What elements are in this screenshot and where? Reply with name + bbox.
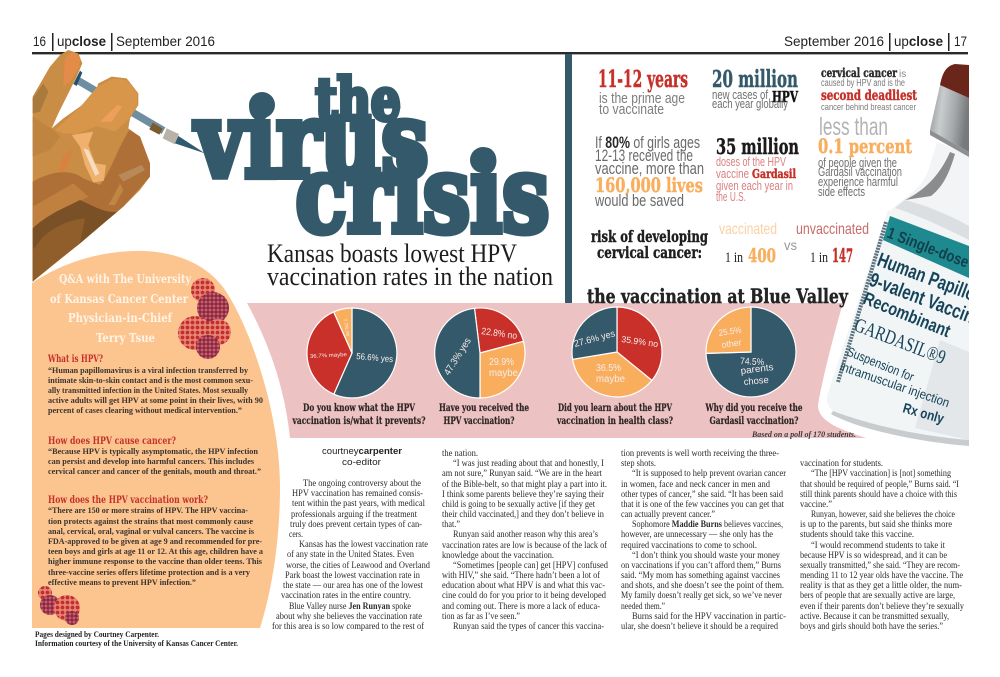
article column 3: in women, face and neck cancer in men and [621, 479, 770, 490]
article column 1: professionals arguing if the treatment [291, 509, 417, 520]
article column 1: tent within the past years, with medical [292, 499, 425, 509]
teal vertical divider [565, 54, 572, 304]
article column 4: boys and girls should both have the series.” [800, 622, 943, 632]
stat: 160,000 lives: vaccine, more than [595, 160, 704, 178]
article column 1: truly does prevent certain types of can- [290, 519, 422, 530]
pie chart: why Gardasil: 74.5% [740, 356, 765, 368]
question: how does HPV cause cancer: cervical cancer and cancer of the genitals, mouth and throat.” [48, 466, 261, 476]
question: how does the vaccination work: higher immune response to the vaccine than older teens. This [48, 556, 263, 566]
credits [35, 630, 238, 648]
question: how does the vaccination work: “There are 150 or more strains of HPV. The HPV vaccina- [48, 505, 248, 515]
question: how does the vaccination work: effective means to prevent HPV infection.” [48, 577, 196, 587]
article column 2: cine could do for you prior to it being developed [442, 590, 606, 601]
article column 4 [800, 458, 964, 632]
pie chart: why Gardasil: Gardasil vaccination? [710, 416, 799, 427]
stat: new cases: HPV [772, 88, 798, 106]
pie chart: health class: 35.9% no [621, 334, 659, 349]
question: what is HPV: “Human papillomavirus is a viral infection transferred by [48, 365, 249, 375]
stat: new cases: each year globally [712, 97, 789, 111]
stat: 160,000 lives: 160,000 lives [595, 173, 703, 197]
stat: new cases [712, 66, 798, 111]
stat: 35 million doses: vaccine [716, 167, 749, 181]
article column 3: other types of cancer,” she said. “It has been said [621, 489, 783, 500]
byline: co-editor [342, 457, 381, 468]
stat: risk of developing cervical cancer: 400 [748, 245, 776, 267]
stat: 160,000 lives: would be saved [594, 192, 684, 210]
article column 3: on vaccinations if you can’t afford them,” Burns [621, 560, 781, 571]
pie chart: health class: 27.6% yes [573, 328, 617, 350]
article column 4: “I would recommend students to take it [811, 541, 945, 551]
stat: second deadliest: caused by HPV and is the [821, 78, 905, 89]
article column 3: that it is one of the few vaccines you can get that [621, 499, 784, 510]
pie chart: have you received: HPV vaccination? [444, 416, 515, 427]
page header: left: upclose [57, 34, 106, 49]
question: how does the vaccination work: tion protects against the strains that most commonly cause [48, 516, 253, 526]
stat: 35 million doses: Gardasil [752, 167, 796, 181]
stat: prime age: is the prime age [599, 90, 685, 107]
stat: risk of developing cervical cancer [591, 221, 869, 267]
illustration: Gardasil vial: Recombinant [861, 288, 953, 341]
question: what is HPV: What is HPV? [47, 354, 103, 365]
question: how does the vaccination work: three-vaccine series offers lifetime protection and is a very [48, 567, 251, 577]
article column 2: of the Bible-belt, so that might play a part into it. [442, 479, 607, 490]
stat: second deadliest [821, 66, 917, 113]
stat: 35 million doses [716, 134, 799, 204]
article column 1: worse, the cities of Leawood and Overland [286, 560, 430, 571]
article column 2: the nation. [442, 449, 478, 459]
article column 3: Burns said for the HPV vaccination in partic- [632, 611, 786, 622]
article column 3: Sophomore Maddie Burns believes vaccines, [632, 520, 783, 530]
pie chart: do you know: Do you know what the HPV [303, 403, 415, 414]
article column 3: and shots, and she doesn’t see the point of them. [621, 580, 784, 591]
question: how does the vaccination work [48, 494, 264, 587]
title: the virus crisis: the [316, 66, 400, 134]
sidebar heading: of Kansas Cancer Center [50, 291, 188, 306]
article column 4: students should take this vaccine. [800, 530, 914, 540]
stat: 35 million doses: doses of the HPV [716, 155, 786, 169]
article column 1: the state — our area has one of the lowest [283, 580, 423, 591]
article column 3: tion prevents is well worth receiving the three- [621, 449, 779, 459]
pie chart: have you received: Have you received the [439, 403, 529, 414]
question: what is HPV: active adults will get HPV at some point in their lives, with 90 [48, 395, 263, 405]
stat: risk of developing cervical cancer: 1 in [810, 250, 828, 266]
heading: the vaccination at Blue Valley: the vaccination at Blue Valley [587, 284, 849, 308]
stat: prime age [598, 66, 688, 118]
pie chart: why Gardasil: other [721, 337, 742, 350]
article column 4: still think parents should have a choice with this [800, 490, 957, 500]
article column 2: and coming out. There is more a lack of educa- [442, 601, 600, 612]
question: how does the vaccination work: anal, cervical, oral, vaginal or vulval cancers. The vaccine is [48, 526, 255, 536]
article column 3: required vaccinations to come to school. [621, 541, 757, 551]
article column 2: knowledge about the vaccination. [442, 551, 554, 561]
pie chart: do you know: vaccination is/what it prevents? [292, 416, 426, 427]
pie chart: why Gardasil: chose [743, 375, 769, 388]
title: the virus crisis: virus [194, 78, 428, 202]
pie chart: why Gardasil: 25.5% [718, 325, 742, 338]
poll note: Based on a poll of 170 students. [751, 429, 856, 439]
stat: 35 million doses: 35 million [716, 134, 799, 159]
pie chart: why Gardasil: parents [740, 362, 774, 377]
pie chart: health class: 36.5% [596, 363, 621, 374]
article column 3: step shots. [621, 459, 656, 469]
stat: new cases: 20 million [712, 66, 798, 93]
article column 4: vaccine.” [800, 500, 832, 510]
stat: second deadliest: is [899, 69, 906, 80]
article column 2: am not sure,” Runyan said. “We are in the heart [442, 469, 602, 479]
credits: Pages designed by Courtney Carpenter. [35, 630, 159, 639]
pie chart: have you received: 29.9% [489, 357, 514, 368]
illustration: Gardasil vial: 1 Single-dose [885, 225, 971, 272]
article column 3: needed them.” [621, 602, 665, 612]
pie chart: have you received: 22.8% no [481, 326, 518, 342]
stat: 160,000 lives: 12-13 received the [595, 147, 693, 165]
question: what is HPV: ally transmitted infection in the United States. Most sexually [48, 385, 249, 395]
article column 1 [272, 479, 430, 632]
stat: risk of developing cervical cancer: cervical cancer: [597, 243, 702, 262]
title: the virus crisis [194, 66, 550, 256]
article column 4: even if their parents don’t believe they’re sexually [800, 601, 964, 612]
icon: virus cluster top [178, 278, 231, 359]
question: what is HPV: percent of cases clearing without medical intervention.” [48, 405, 242, 415]
subtitle: vaccination rates in the nation [267, 262, 553, 291]
illustration: Gardasil vial: Suspension for [845, 344, 917, 385]
page header: left: 16 [33, 34, 46, 49]
pie chart: do you know: 7.7% no [341, 318, 351, 337]
sidebar heading: Q&A with The University [59, 271, 192, 286]
article column 4: active. Because it can be transmitted sexually, [800, 612, 949, 622]
stat: less than 0.1 percent: experience harmful [818, 175, 898, 189]
page header: left: September 2016 [116, 34, 215, 49]
question: how does HPV cause cancer: How does HPV cause cancer? [48, 435, 176, 447]
sidebar heading [50, 271, 192, 345]
pie chart: have you received: 47.3% yes [442, 336, 474, 378]
stat: risk of developing cervical cancer: vs [784, 237, 797, 253]
sidebar heading: Terry Tsue [96, 330, 155, 345]
pie chart: do you know [292, 308, 426, 427]
article column 4: is up to the parents, but said she thinks more [800, 520, 952, 530]
illustration: Gardasil vial: GARDASIL®9 [851, 314, 949, 369]
stat: 160,000 lives [594, 134, 704, 210]
question: how does the vaccination work: How does the HPV vaccination work? [48, 494, 208, 506]
article column 2: tion as far as I’ve seen.” [442, 611, 520, 622]
panel: Q&A sidebar [32, 251, 280, 628]
stat: second deadliest: cancer behind breast cancer [821, 102, 916, 113]
article column 2: child is going to be sexually active [if they get [442, 499, 595, 510]
illustration: hand with syringe [33, 50, 205, 282]
panel: poll charts background [247, 303, 866, 438]
article column 3: however, are unnecessary — she only has the [621, 530, 773, 540]
stat: less than 0.1 percent: side effects [818, 185, 865, 199]
question: how does HPV cause cancer: can persist and develop into harmful cancers. This includes [48, 456, 255, 466]
question: what is HPV: intimate skin-to-skin contact and is the most common sexu- [48, 375, 253, 385]
illustration: Gardasil vial [827, 64, 978, 446]
article column 3: said. “My mom has something against vaccines [621, 571, 780, 581]
page header: left [33, 33, 215, 51]
article column 2: vaccination rates are low is because of the lack of [442, 540, 608, 551]
stat: new cases: new cases of [712, 88, 768, 102]
article column 1: Blue Valley nurse Jen Runyan spoke [289, 602, 411, 612]
article column 2 [442, 449, 608, 632]
article column 1: cers. [289, 530, 303, 540]
article column 1: of any state in the United States. Even [287, 549, 414, 560]
pie chart: health class [556, 307, 673, 427]
stat: risk of developing cervical cancer: 1 in [725, 250, 743, 266]
stat: risk of developing cervical cancer: unvaccinated [796, 221, 869, 238]
article column 2: that.” [442, 520, 460, 530]
credits: Information courtesy of the University of Kansas Cancer Center. [35, 639, 238, 648]
page header: right: 17 [954, 34, 967, 49]
article column 4: mending 11 to 12 year olds have the vaccine. The [800, 571, 963, 581]
article column 4: because HPV is so widespread, and it can be [800, 551, 947, 561]
title: the virus crisis: crisis [296, 132, 550, 256]
article column 4: that should be required of people,” Burns said. “I [800, 479, 959, 490]
pie chart: why Gardasil: Why did you receive the [705, 403, 802, 414]
sidebar heading: Physician-in-Chief [68, 310, 173, 325]
pie chart: do you know: 56.6% yes [356, 351, 394, 364]
question: how does HPV cause cancer: “Because HPV is typically asymptomatic, the HPV infection [48, 446, 258, 456]
subtitle: Kansas boasts lowest HPV [267, 239, 517, 268]
byline [322, 446, 402, 468]
stat: risk of developing cervical cancer: 147 [832, 245, 853, 267]
stat: risk of developing cervical cancer: risk of developing [591, 227, 708, 246]
article column 1: The ongoing controversy about the [303, 479, 421, 489]
pie chart: have you received: maybe [489, 368, 518, 379]
article column 3: can actually prevent cancer.” [621, 510, 715, 520]
article column 2: their child vaccinated,] and they don’t believe in [442, 510, 604, 520]
article column 2: I think some parents believe they’re saying their [442, 490, 605, 500]
article column 3: My family doesn’t really get sick, so we’ve never [621, 590, 783, 601]
article column 3: “I don’t think you should waste your money [632, 551, 780, 561]
byline: courtneycarpenter [322, 446, 402, 457]
panel: statistics [591, 66, 917, 267]
article column 2: Runyan said the types of cancer this vaccina- [453, 621, 604, 632]
stat: 35 million doses: given each year in [716, 179, 793, 193]
stat: less than 0.1 percent: Gardasil vaccination [818, 165, 902, 179]
stat: second deadliest: second deadliest [821, 88, 917, 104]
stat: risk of developing cervical cancer: vaccinated [719, 221, 777, 238]
pie chart: do you know: 36.7% maybe [310, 352, 347, 360]
article column 1: HPV vaccination has remained consis- [292, 489, 423, 499]
subtitle [267, 239, 553, 291]
stat: prime age: 11-12 years [598, 66, 688, 93]
article column 1: about why she believes the vaccination rate [276, 612, 422, 622]
pie chart: health class: maybe [596, 374, 625, 385]
question: how does the vaccination work: teen boys and girls at age 11 or 12. At this age, children have a [48, 546, 264, 556]
article column 3: ular, she doesn’t believe it should be a required [621, 622, 778, 632]
article column 4: sexually transmitted,” she said. “They are recom- [800, 561, 960, 571]
article column 1: Kansas has the lowest vaccination rate [299, 540, 428, 550]
page header: right [784, 33, 967, 51]
page header: right: upclose [894, 34, 943, 49]
article column 4: Runyan, however, said she believes the choice [811, 510, 955, 520]
article column 2: Runyan said another reason why this area’s [453, 530, 598, 540]
page header: right: September 2016 [784, 34, 884, 49]
article column 3 [621, 449, 787, 632]
article column 3: “It is supposed to help prevent ovarian cancer [632, 469, 787, 479]
article column 4: “The [HPV vaccination] is [not] something [811, 469, 951, 479]
pie chart: why Gardasil [705, 307, 802, 427]
stat: less than 0.1 percent: of people given the [818, 156, 897, 170]
article column 1: vaccination rates in the entire country. [281, 591, 411, 601]
icon: virus cluster bottom [38, 586, 80, 625]
illustration: Gardasil vial: Rx only [901, 400, 946, 427]
illustration: Gardasil vial: intramuscular injection [838, 359, 952, 410]
stat: less than 0.1 percent: 0.1 percent [818, 134, 913, 158]
article column 2: “Sometimes [people can] get [HPV] confused [453, 560, 608, 571]
article column 4: reality is that as they get a little older, the num- [800, 581, 962, 591]
stat: second deadliest: cervical cancer [821, 66, 898, 80]
stat: 35 million doses: the U.S. [716, 190, 746, 204]
article column 4: vaccination for students. [800, 458, 883, 469]
question: how does HPV cause cancer [48, 435, 261, 476]
article column 2: education about what HPV is and what this vac- [442, 581, 605, 591]
article column 2: “I was just reading about that and honestly, I [453, 459, 604, 469]
article column 2: with HIV,” she said. “There hadn’t been a lot of [442, 570, 601, 581]
pie chart: health class: Did you learn about the HPV [558, 403, 672, 414]
pie chart: health class: vaccination in health class? [556, 416, 673, 427]
pie chart: have you received [435, 308, 529, 427]
question: what is HPV [47, 354, 263, 415]
article column 1: for this area is so low compared to the rest of [272, 621, 425, 632]
question: how does the vaccination work: FDA-approved to be given at age 9 and recommended for pre- [48, 536, 262, 546]
stat: less than 0.1 percent [818, 113, 913, 199]
stat: 160,000 lives: If 80% of girls ages [595, 134, 700, 152]
article column 1: Park boast the lowest vaccination rate in [285, 571, 420, 581]
stat: prime age: to vaccinate [599, 101, 664, 118]
stat: less than 0.1 percent: less than [819, 113, 888, 141]
article column 4: bers of people that are sexually active are large, [800, 590, 955, 601]
